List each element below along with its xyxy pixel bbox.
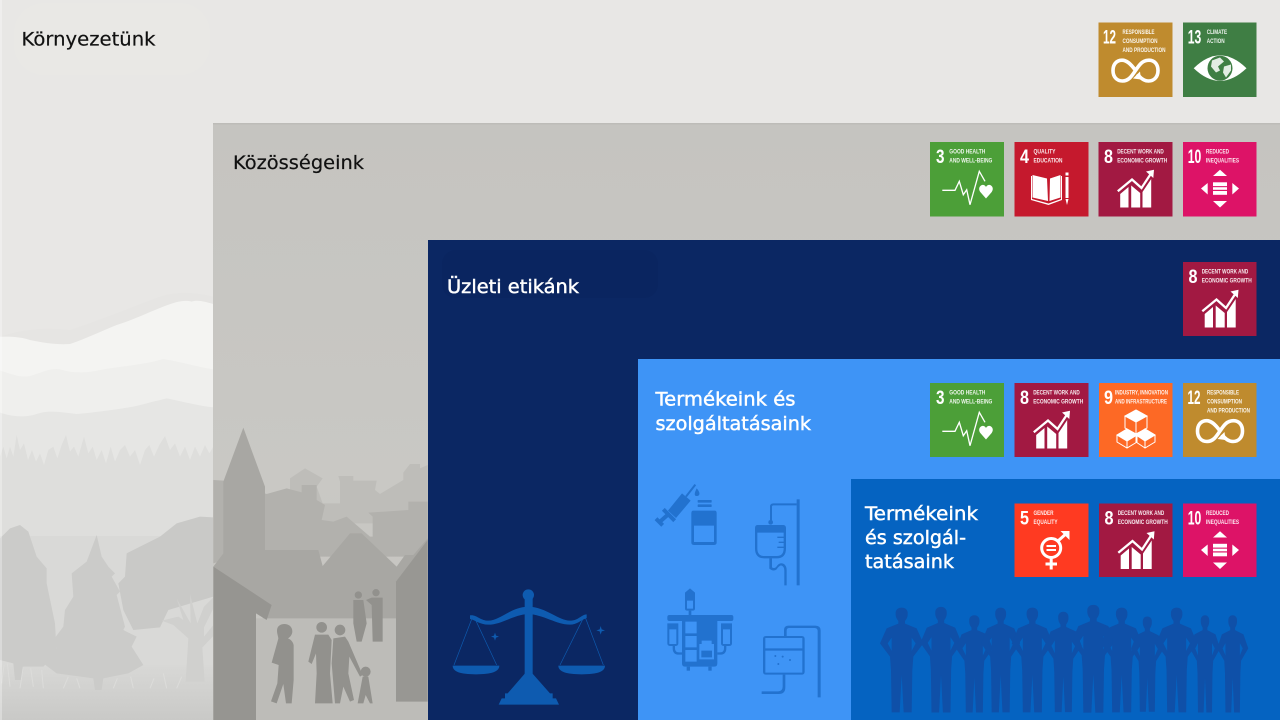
middle houses xyxy=(213,480,428,563)
illustration: village with people xyxy=(213,428,428,720)
icon: treatment cart xyxy=(667,588,733,671)
right front house xyxy=(396,540,428,702)
SDG tile 4: EDUCATION xyxy=(1034,158,1063,165)
SDG tile 8: 8 xyxy=(1020,388,1029,409)
left front house xyxy=(213,567,272,720)
SDG tile 3: AND WELL-BEING xyxy=(949,399,992,406)
SDG tile 12 xyxy=(1098,22,1172,97)
SDG tile 5: 5 xyxy=(1020,508,1029,530)
SDG tile 12: CONSUMPTION xyxy=(1122,38,1158,45)
title: Termékeink és szolgál-tatásaink: Termékeink xyxy=(864,503,978,525)
tree: pine xyxy=(43,535,143,690)
SDG tile 13: ACTION xyxy=(1207,38,1225,45)
SDG tile 8: DECENT WORK AND xyxy=(1118,510,1164,517)
SDG tile 8: ECONOMIC GROWTH xyxy=(1033,399,1083,406)
tree: broad-leaf xyxy=(118,517,213,630)
tree: oak trunk xyxy=(162,594,213,682)
title: Környezetünk: Környezetünk xyxy=(22,28,156,50)
SDG tile 10: REDUCED xyxy=(1206,149,1229,156)
SDG tile 13 xyxy=(1183,22,1256,97)
SDG tile 8 xyxy=(1098,142,1172,216)
SDG tile 9: INDUSTRY, INNOVATION xyxy=(1115,390,1168,397)
SDG tile 8: ECONOMIC GROWTH xyxy=(1117,158,1167,165)
SDG tile 10: INEQUALITIES xyxy=(1206,519,1239,526)
SDG tile 3: GOOD HEALTH xyxy=(949,149,985,156)
SDG tile 4 xyxy=(1014,142,1088,216)
SDG tile 12: RESPONSIBLE xyxy=(1207,390,1239,397)
SDG tile 8: 8 xyxy=(1188,267,1198,288)
people silhouettes xyxy=(271,589,383,703)
SDG tile 3: 3 xyxy=(936,388,944,409)
SDG tile 8 xyxy=(1014,383,1088,457)
panel: Üzleti etikánk xyxy=(428,240,1280,720)
SDG tile 13: 13 xyxy=(1188,28,1201,48)
icon: dialysis machine xyxy=(762,626,821,697)
SDG tile 8: ECONOMIC GROWTH xyxy=(1118,519,1168,526)
church and central houses xyxy=(213,428,428,623)
street xyxy=(256,618,428,720)
SDG tile 12: RESPONSIBLE xyxy=(1122,29,1155,36)
tree: cypress xyxy=(0,525,57,680)
background houses xyxy=(290,464,428,523)
icon: syringe and vial xyxy=(656,485,717,545)
SDG tile 12: CONSUMPTION xyxy=(1207,399,1242,406)
SDG tile 9: AND INFRASTRUCTURE xyxy=(1115,399,1167,406)
SDG tile 8: 8 xyxy=(1104,147,1113,168)
SDG tile 9: 9 xyxy=(1104,388,1113,409)
SDG tile 4: QUALITY xyxy=(1034,149,1056,156)
illustration: mountain and forest landscape xyxy=(0,293,213,720)
SDG tile 3: GOOD HEALTH xyxy=(949,390,985,397)
title: Termékeink és szolgáltatásaink: Termékeink és xyxy=(654,389,796,411)
SDG tile 5: EQUALITY xyxy=(1034,519,1058,526)
title: Közösségeink: Közösségeink xyxy=(233,152,364,174)
SDG tile 10 xyxy=(1183,504,1256,577)
SDG tile 5: GENDER xyxy=(1034,510,1054,517)
SDG tile 3: AND WELL-BEING xyxy=(949,158,992,165)
SDG tile 12: 12 xyxy=(1103,28,1116,48)
SDG tile 12: AND PRODUCTION xyxy=(1122,47,1166,54)
SDG tile 10: 10 xyxy=(1188,147,1201,168)
SDG tile 10: INEQUALITIES xyxy=(1206,158,1239,165)
SDG tile 3: 3 xyxy=(936,147,944,168)
icons: medical products xyxy=(656,485,821,697)
SDG tile 9 xyxy=(1099,383,1172,457)
SDG tile 12: 12 xyxy=(1188,388,1200,409)
title: Termékeink és szolgáltatásaink: szolgáltatásaink xyxy=(656,413,811,435)
SDG tile 8 xyxy=(1183,262,1256,336)
SDG tile 13: CLIMATE xyxy=(1207,29,1228,36)
SDG tile 8: DECENT WORK AND xyxy=(1033,390,1080,397)
SDG tile 10: REDUCED xyxy=(1206,510,1229,517)
panel: Közösségeink xyxy=(213,123,1280,720)
SDG tile 10: 10 xyxy=(1188,508,1201,530)
SDG tile 8: DECENT WORK AND xyxy=(1117,149,1164,156)
icon: infusion bag on stand xyxy=(755,499,800,585)
panel: Termékeink és szolgáltatásaink (belső) xyxy=(851,479,1280,720)
SDG tile 3 xyxy=(930,142,1004,216)
title: Termékeink és szolgál-tatásaink: és szolgál- xyxy=(865,527,966,549)
title: Üzleti etikánk: Üzleti etikánk xyxy=(447,275,579,298)
panel: Termékeink és szolgáltatásaink xyxy=(638,359,1280,720)
SDG tile 8: DECENT WORK AND xyxy=(1202,269,1248,276)
SDG tile 8: ECONOMIC GROWTH xyxy=(1202,278,1252,285)
title: Termékeink és szolgál-tatásaink: tatásaink xyxy=(865,551,954,573)
SDG tile 4: 4 xyxy=(1020,147,1029,168)
SDG tile 3 xyxy=(930,383,1004,457)
SDG tile 12 xyxy=(1183,383,1256,457)
icon: scales of justice xyxy=(453,589,605,705)
SDG tile 8 xyxy=(1099,504,1172,577)
SDG tile 5 xyxy=(1014,504,1088,577)
SDG tile 8: 8 xyxy=(1104,508,1114,530)
illustration: group of people silhouettes xyxy=(880,605,1248,713)
SDG tile 12: AND PRODUCTION xyxy=(1207,408,1250,414)
SDG tile 10 xyxy=(1183,142,1256,216)
